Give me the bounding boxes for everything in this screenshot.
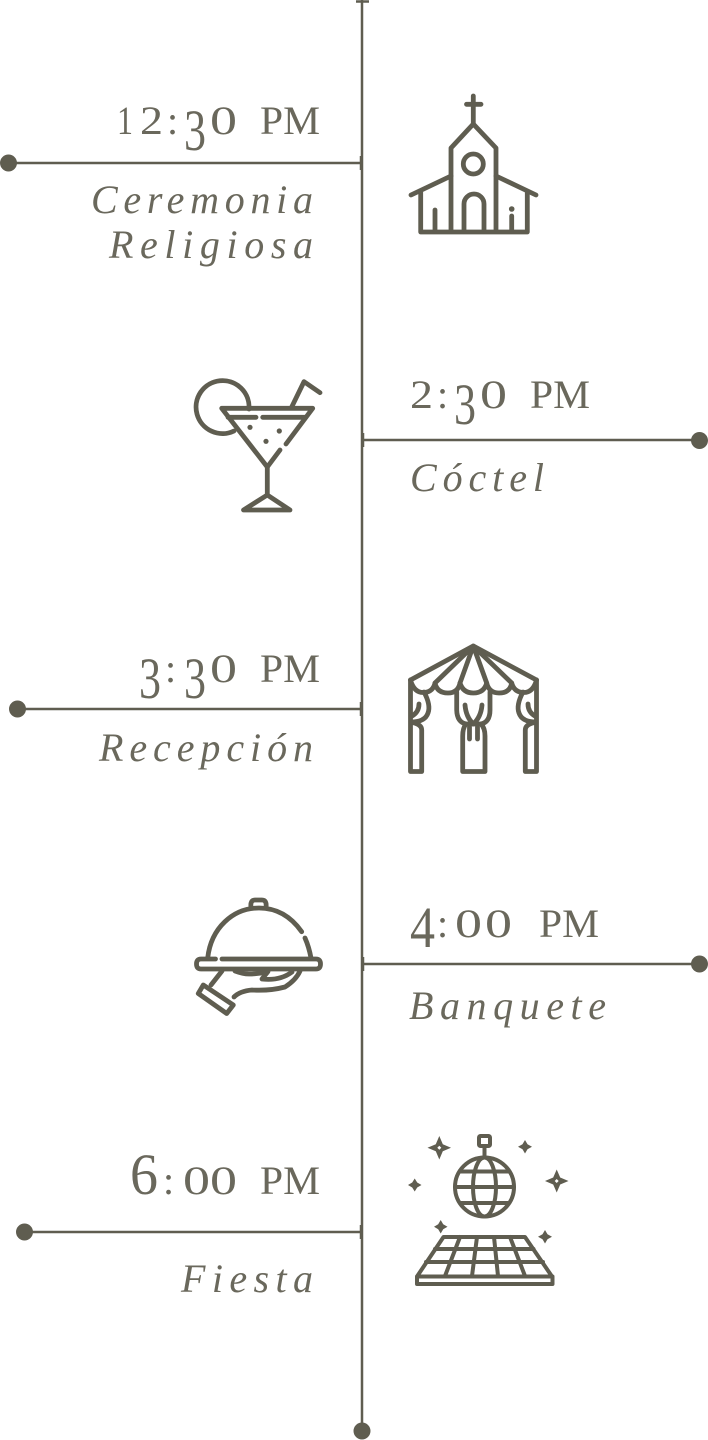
time: 4:00 PM: PM [539,901,599,946]
time: 6:00 PM: : [163,1158,174,1203]
connector line [363,432,708,449]
time: 12:30 PM: 3 [184,98,206,163]
time: 3:30 PM: PM [260,646,320,691]
label: Recepción: Recepción [98,725,313,770]
label: Banquete: Banquete [409,983,606,1028]
icon: church [411,96,536,232]
time: 12:30 PM: 2 [140,98,163,143]
icon: canopy tent [410,646,536,772]
event: Fiesta [16,1136,568,1301]
icon: cocktail glass [196,381,320,510]
time: 6:00 PM: 6 [130,1142,158,1207]
label: Ceremonia Religiosa [91,177,313,267]
time: 3:30 PM: : [165,646,176,691]
time: 4:00 PM: 4 [410,895,435,960]
connector line [16,1224,361,1240]
time: 3:30 PM: 0 [210,646,237,691]
icon: disco ball and dance floor [408,1136,568,1284]
label: Ceremonia Religiosa: Ceremonia [91,177,313,222]
time: 2:30 PM: 3 [454,372,476,437]
time: 12:30 PM: PM [260,98,320,143]
time: 3:30 PM: 3 [139,646,161,711]
connector line [363,956,708,972]
event: Recepción [9,646,536,772]
connector line [0,154,361,172]
time: 4:00 PM: 0 [455,901,482,946]
sparkles [408,1136,568,1244]
timeline: vertical axis [354,0,370,1440]
time: 4:00 PM: 0 [485,901,512,946]
time: 6:00 PM: PM [260,1158,320,1203]
event: Cóctel [196,372,708,510]
time: 2:30 PM: 2 [410,372,433,417]
time: 2:30 PM: PM [530,372,590,417]
event: Banquete [196,895,708,1028]
time: 3:30 PM: 3 [184,646,206,711]
time: 2:30 PM: : [437,372,448,417]
time: 2:30 PM: 0 [480,372,507,417]
connector line [9,700,361,718]
event: Ceremonia Religiosa [0,96,536,267]
time: 6:00 PM: 0 [210,1158,237,1203]
label: Ceremonia Religiosa: Religiosa [108,222,313,267]
time: 6:00 PM: 0 [183,1158,210,1203]
label: Cóctel: Cóctel [410,455,544,500]
label: Fiesta: Fiesta [180,1256,313,1301]
time: 12:30 PM: 1 [117,98,133,143]
time: 12:30 PM: : [167,98,178,143]
icon: serving cloche on hand [196,900,320,1014]
time: 4:00 PM: : [437,901,448,946]
time: 12:30 PM: 0 [210,98,237,143]
